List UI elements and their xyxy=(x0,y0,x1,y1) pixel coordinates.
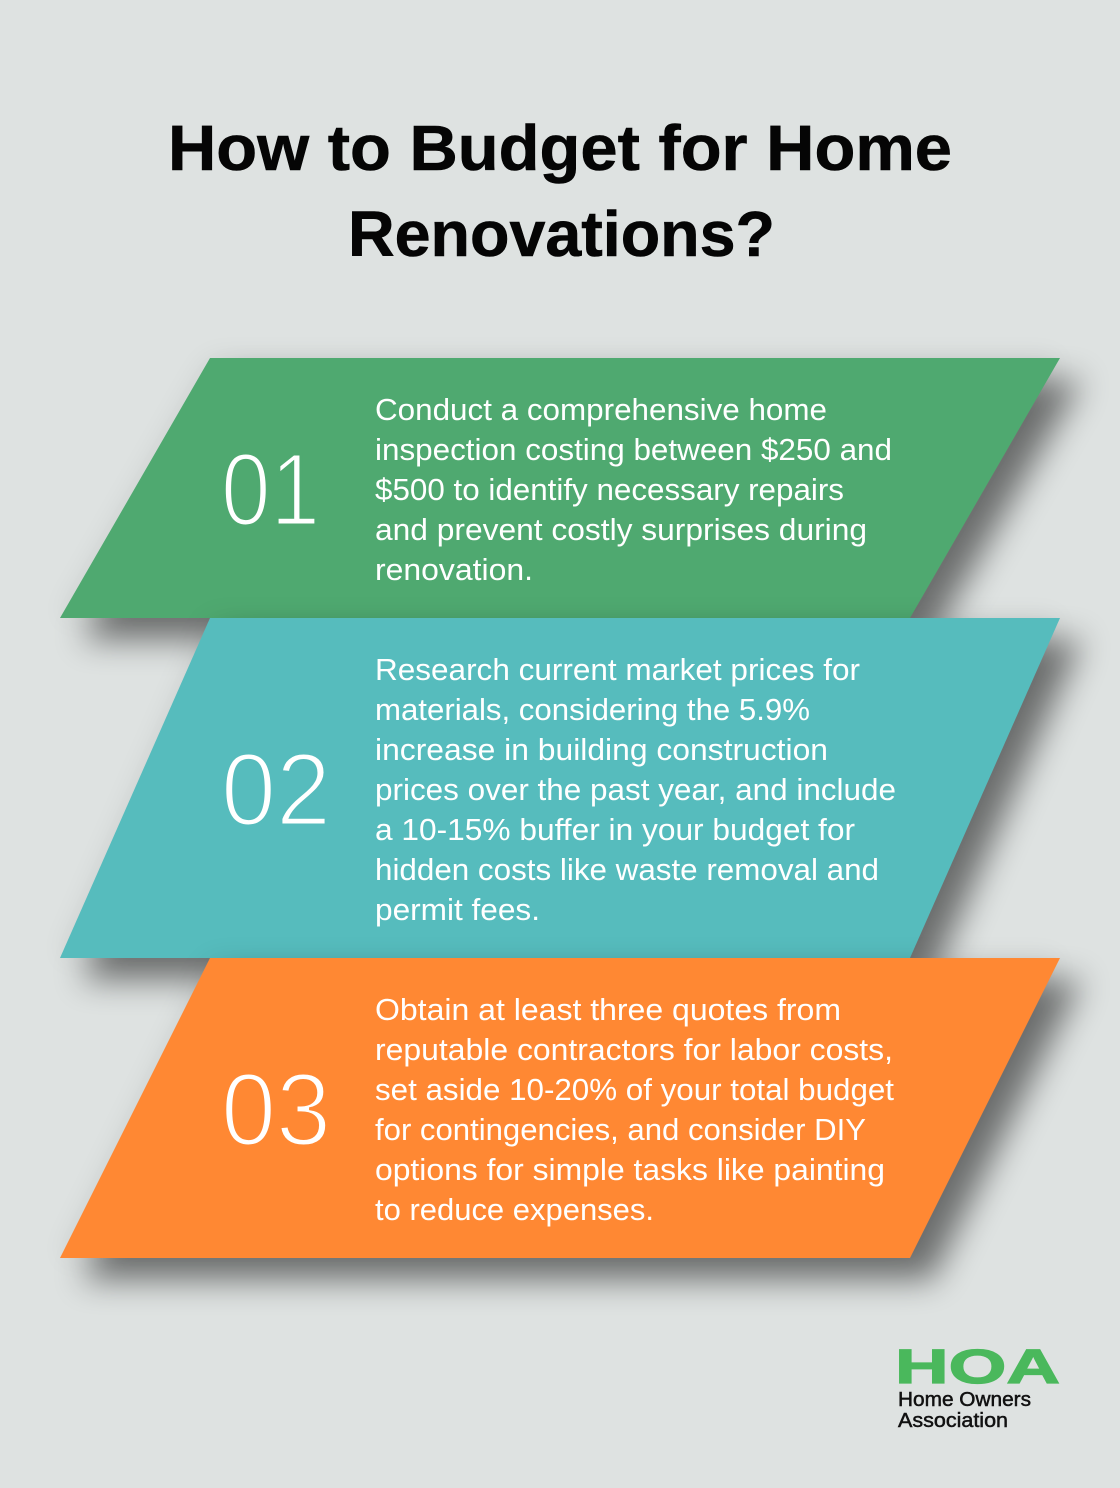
number 01: 01 xyxy=(221,432,320,547)
text block: step 03: reputable contractors for labor costs, xyxy=(375,1032,893,1067)
text block: step 01: $500 to identify necessary repairs xyxy=(375,472,844,507)
logo mark: HOA: HOA xyxy=(895,1341,1060,1394)
text block: step 02: prices over the past year, and include xyxy=(375,772,896,807)
text block: step 02: materials, considering the 5.9% xyxy=(375,692,810,727)
text block: step 01: inspection costing between $250 and xyxy=(375,432,892,467)
text block: step 03: to reduce expenses. xyxy=(375,1192,654,1227)
title: How to Budget for Home xyxy=(168,112,952,184)
logo wordmark xyxy=(898,1389,1031,1432)
text block: step 01 xyxy=(375,392,892,587)
number 02: 02 xyxy=(221,732,331,847)
text block: step 03 xyxy=(375,992,894,1227)
text block: step 02: a 10-15% buffer in your budget for xyxy=(375,812,855,847)
text block: step 03: options for simple tasks like painting xyxy=(375,1152,885,1187)
text block: step 03: Obtain at least three quotes from xyxy=(375,992,841,1027)
panel shape: teal parallelogram xyxy=(60,618,1060,958)
panel: step 03 xyxy=(60,958,1060,1258)
logo wordmark: Home Owners xyxy=(898,1389,1031,1411)
text block: step 03: set aside 10-20% of your total budget xyxy=(375,1072,894,1107)
panel: step 02 xyxy=(60,618,1060,958)
text block: step 02: Research current market prices for xyxy=(375,652,860,687)
logo: Home Owners Association xyxy=(895,1341,1060,1432)
text block: step 01: renovation. xyxy=(375,552,533,587)
text block: step 03: for contingencies, and consider DIY xyxy=(375,1112,866,1147)
panel: step 01 xyxy=(60,358,1060,618)
number 03: 03 xyxy=(221,1052,331,1167)
text block: step 01: Conduct a comprehensive home xyxy=(375,392,827,427)
panel shape: orange parallelogram xyxy=(60,958,1060,1258)
logo wordmark: Association xyxy=(898,1410,1008,1432)
title: Renovations? xyxy=(348,198,775,270)
text block: step 02: hidden costs like waste removal and xyxy=(375,852,879,887)
text block: step 02 xyxy=(375,652,896,927)
title xyxy=(168,112,952,270)
text block: step 02: permit fees. xyxy=(375,892,540,927)
panel shape: green parallelogram xyxy=(60,358,1060,618)
text block: step 02: increase in building construction xyxy=(375,732,828,767)
text block: step 01: and prevent costly surprises during xyxy=(375,512,867,547)
